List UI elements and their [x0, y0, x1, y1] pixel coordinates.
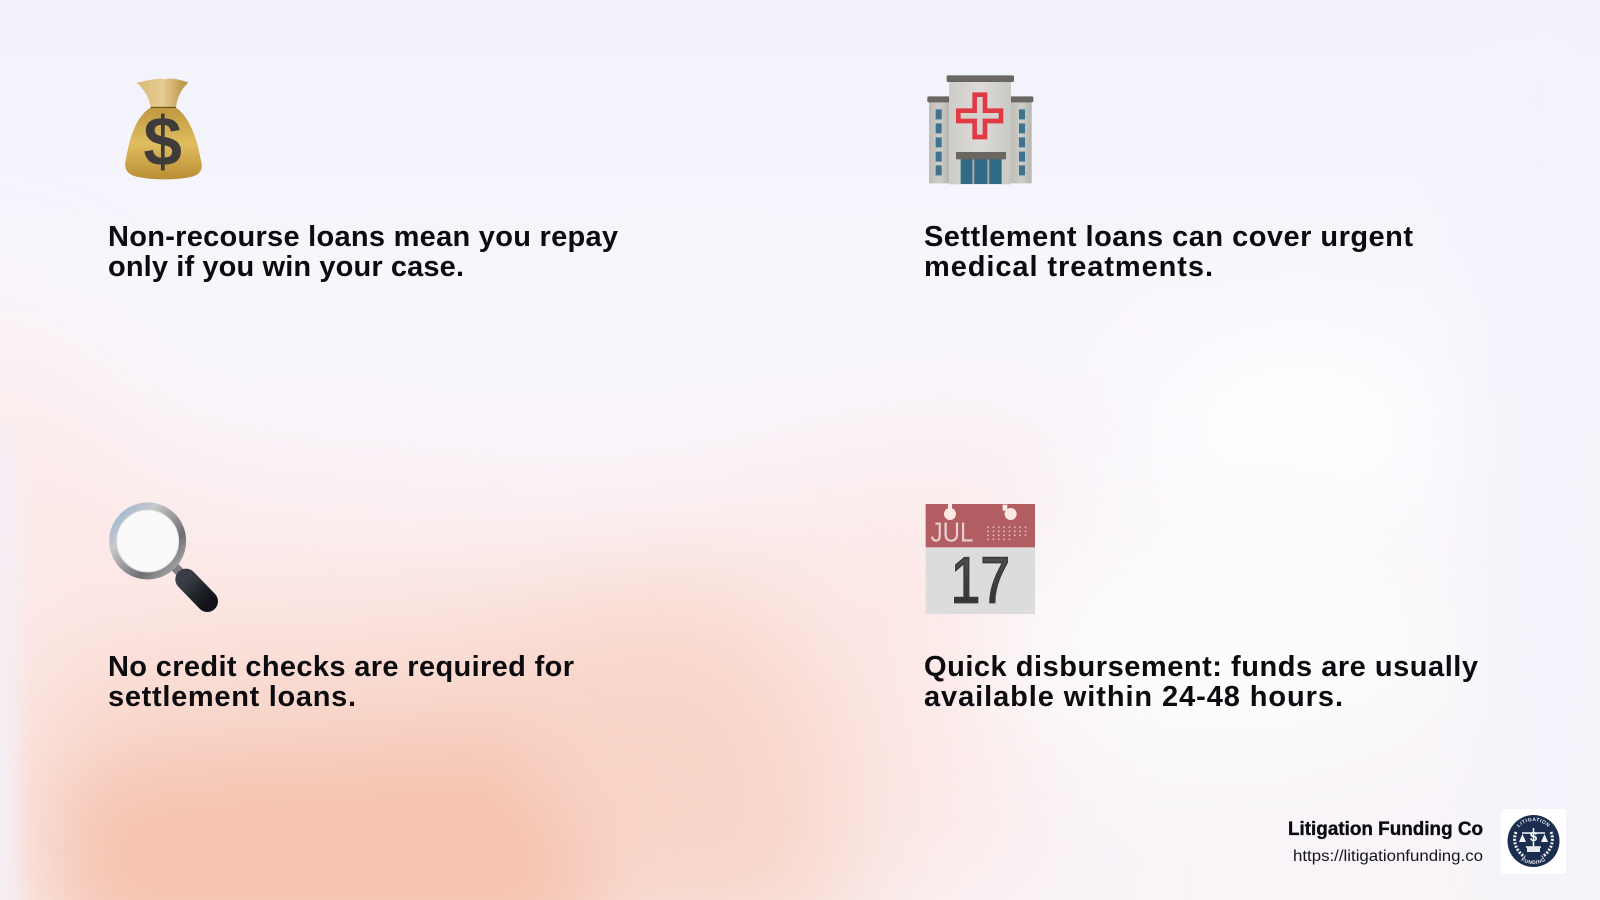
logo: FUNDING	[1521, 858, 1545, 864]
text: disbursement: available within 24-48 hours.	[924, 681, 1343, 713]
text: medical: Settlement loans can cover urgent	[924, 221, 1413, 253]
text: disbursement	[924, 651, 1478, 713]
panel: quick disbursement	[924, 504, 1478, 713]
text: credit checks	[108, 651, 574, 713]
company name: Litigation Funding Co	[1288, 819, 1483, 840]
footer: brand	[1288, 809, 1566, 874]
text: credit checks: settlement loans.	[108, 681, 356, 713]
text: non-recourse: only if you win your case.	[108, 251, 464, 283]
logo: LITIGATION	[1516, 818, 1550, 828]
icon: calendar: 17	[951, 544, 1010, 617]
text: medical: medical treatments.	[924, 251, 1213, 283]
icon: calendar: JUL	[931, 517, 973, 548]
panel: non-recourse loans	[108, 79, 618, 283]
logo: $	[1530, 829, 1538, 844]
company url: https://litigationfunding.co	[1293, 848, 1483, 865]
panel: no credit checks	[108, 506, 574, 713]
text: non-recourse: Non-recourse loans mean you repay	[108, 221, 618, 253]
icon: magnifying glass	[113, 506, 207, 601]
logo	[1501, 809, 1566, 874]
text: non-recourse	[108, 221, 618, 283]
icon: money bag	[125, 79, 202, 181]
text: credit checks: No credit checks are required for	[108, 651, 574, 683]
icon: calendar	[926, 504, 1035, 617]
text: medical	[924, 221, 1413, 283]
text: disbursement: Quick disbursement: funds are usually	[924, 651, 1478, 683]
panel: medical treatments	[924, 75, 1413, 283]
icon: money bag: $	[143, 103, 182, 181]
icon: hospital	[927, 75, 1033, 184]
